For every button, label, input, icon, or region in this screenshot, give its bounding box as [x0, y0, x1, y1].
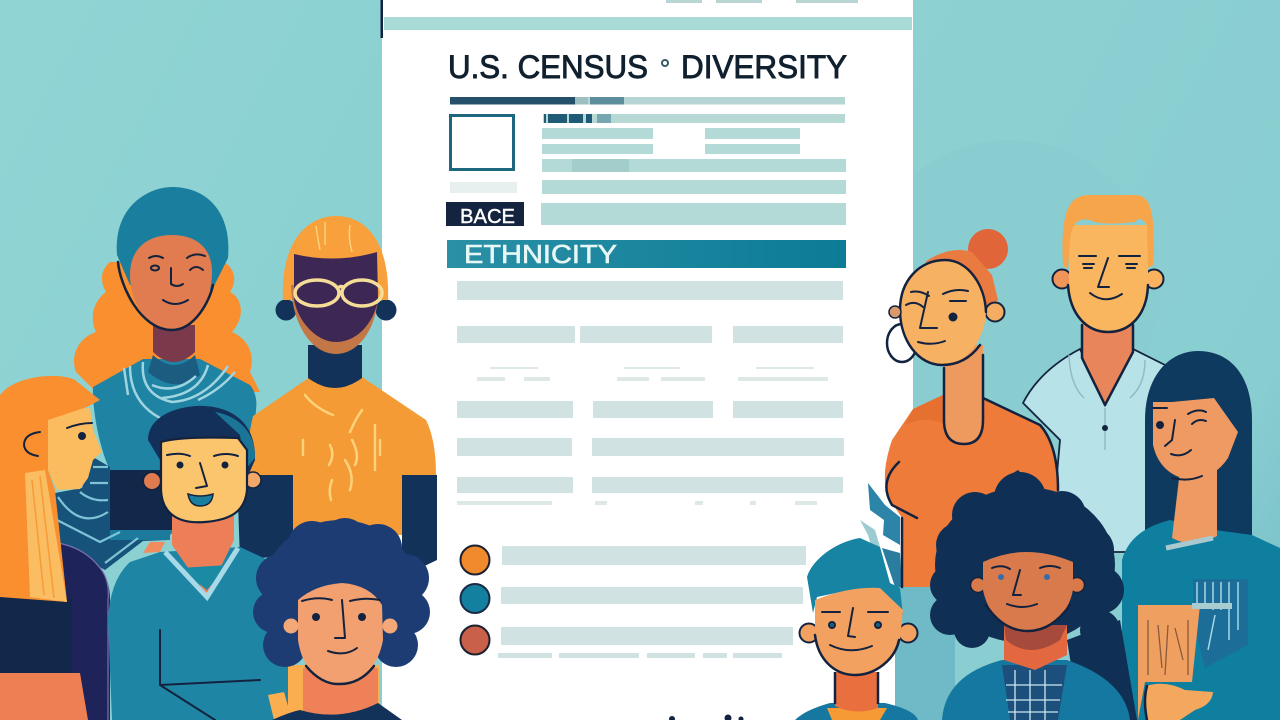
legend dot teal	[460, 584, 490, 613]
orange collar strip	[288, 665, 380, 720]
ear right	[376, 300, 396, 320]
face	[983, 552, 1073, 631]
purple body	[0, 543, 110, 720]
scarf lines	[124, 362, 235, 418]
decorative leaves	[860, 483, 902, 587]
face	[48, 408, 102, 490]
neck	[308, 345, 362, 388]
beauty mark	[948, 312, 958, 322]
title right: DIVERSITY	[681, 49, 847, 85]
v collar	[165, 548, 238, 597]
chin outline	[306, 666, 374, 684]
person: woman with long dark hair and book	[1122, 351, 1280, 720]
plaid lines	[1006, 670, 1062, 720]
navy sleeves	[237, 475, 293, 560]
ear right	[245, 472, 261, 488]
right ear	[986, 302, 1004, 322]
chin outline	[986, 605, 1070, 631]
pocket stripes	[1197, 582, 1238, 650]
legend with colored dots	[460, 546, 806, 658]
progress bar	[450, 97, 845, 104]
document left edge line	[380, 0, 383, 38]
neck	[303, 668, 378, 720]
facial features	[149, 254, 205, 304]
person: blond man in light shirt	[1023, 195, 1165, 552]
face	[900, 260, 986, 365]
hair	[1063, 195, 1154, 270]
face details	[167, 454, 238, 488]
navy shirt shoulder	[272, 703, 402, 720]
sweater	[108, 547, 290, 720]
hair	[148, 406, 255, 478]
hand	[1146, 684, 1213, 720]
ethnicity heading bar	[447, 239, 846, 269]
eyes	[998, 574, 1050, 580]
neck	[835, 672, 878, 712]
teal cuff strip	[110, 530, 170, 540]
legend dot orange	[460, 546, 490, 574]
title left: U.S. CENSUS	[448, 49, 648, 85]
form rows lower	[457, 281, 844, 505]
navy band	[0, 598, 72, 673]
race label	[446, 202, 524, 228]
legend bars	[498, 546, 806, 658]
chin line	[1172, 476, 1202, 480]
torso shade	[905, 394, 945, 425]
book	[1138, 605, 1200, 720]
hair highlight	[215, 412, 255, 470]
body line	[886, 462, 917, 587]
ear right	[382, 618, 398, 634]
title dot	[662, 60, 668, 66]
light hair strand	[25, 470, 67, 602]
person: woman with long orange hair	[0, 376, 168, 720]
neck	[172, 510, 234, 595]
striped sleeve	[55, 457, 168, 570]
jaw	[291, 285, 378, 354]
background: soft circle	[860, 140, 1160, 440]
ears	[970, 578, 986, 592]
long hair	[1145, 351, 1252, 535]
face	[130, 235, 212, 330]
navy sleeve	[110, 470, 172, 530]
face	[161, 438, 247, 522]
hand outline	[1145, 686, 1147, 720]
hair cap	[925, 250, 998, 310]
ears	[276, 300, 296, 320]
ear	[24, 432, 40, 456]
face details	[302, 598, 380, 653]
jaw outline	[118, 262, 213, 330]
neck outline	[1082, 325, 1133, 405]
background: right teal	[895, 0, 1280, 720]
background: lower teal panel	[895, 587, 955, 720]
face	[1153, 398, 1238, 480]
collar lines	[1069, 355, 1145, 450]
left earlobe	[889, 306, 901, 318]
background: left teal	[0, 0, 383, 720]
shirt	[795, 703, 918, 720]
hair	[0, 376, 100, 602]
dark face	[294, 252, 378, 342]
bottom marks	[669, 714, 744, 720]
torso	[93, 359, 256, 535]
neck	[1004, 625, 1067, 670]
inner collar	[180, 565, 228, 590]
person: boy in teal sweater	[108, 406, 290, 720]
ears	[143, 472, 161, 490]
ears	[1052, 270, 1072, 288]
coral patch behind collar	[143, 542, 165, 553]
hair	[807, 538, 903, 615]
shirt pattern	[303, 395, 380, 500]
ears	[800, 624, 818, 642]
hair strand lines	[32, 476, 54, 598]
face details	[906, 290, 968, 344]
book edge	[1192, 603, 1232, 609]
curly hair	[930, 470, 1124, 650]
hair	[283, 216, 388, 300]
form rows top	[541, 114, 846, 225]
curly hair	[253, 518, 430, 667]
neck	[1082, 322, 1133, 405]
torso	[885, 394, 1058, 587]
person: man with glasses and orange shirt	[237, 216, 437, 573]
ears	[284, 618, 298, 634]
neck	[944, 345, 983, 444]
eye	[67, 423, 92, 439]
ethnicity heading bar: ETHNICITY	[464, 239, 617, 269]
collar dark	[148, 355, 200, 384]
face details	[992, 566, 1060, 607]
button	[1102, 425, 1108, 431]
legend dot red	[460, 626, 490, 654]
faint header text strip	[666, 0, 858, 3]
chin outline	[1068, 285, 1148, 332]
right sleeve	[402, 475, 437, 573]
bun	[968, 229, 1008, 269]
sleeve stripes	[57, 467, 138, 563]
plaid shirt	[1002, 665, 1067, 720]
photo box	[450, 116, 514, 170]
neck shadow	[1004, 625, 1067, 650]
glasses	[295, 280, 382, 306]
chin outline	[815, 635, 899, 675]
body edge	[58, 543, 108, 720]
cap	[117, 187, 228, 290]
person: woman with hair bun in orange top	[885, 229, 1058, 587]
neck outline	[835, 672, 878, 704]
orange curly hair	[74, 262, 260, 392]
neck	[153, 325, 195, 362]
ear right	[1144, 270, 1164, 288]
book strokes	[1148, 620, 1188, 675]
neck	[1172, 470, 1217, 544]
hair streaks	[316, 222, 352, 252]
face	[815, 588, 903, 675]
striped pocket	[1193, 579, 1248, 668]
face details	[1079, 256, 1140, 299]
hair behind shoulder	[1067, 620, 1137, 720]
person: curly haired woman	[930, 470, 1137, 720]
sweater	[1122, 520, 1280, 720]
face details	[1153, 408, 1206, 455]
shirt	[247, 377, 436, 535]
top header band	[384, 17, 912, 30]
mouth	[188, 494, 213, 506]
ear right	[1070, 578, 1084, 592]
shoulder line	[983, 398, 1058, 490]
orange undershirt	[827, 708, 887, 720]
face	[298, 583, 383, 684]
face details	[822, 608, 888, 650]
earring	[887, 324, 917, 362]
face	[1069, 225, 1148, 332]
person: boy with teal hair	[795, 538, 918, 720]
shirt	[1023, 349, 1165, 552]
ear right	[898, 624, 918, 642]
person: curly haired boy	[253, 518, 430, 720]
neck outline	[944, 355, 983, 444]
coral lower	[0, 673, 88, 720]
person: woman with teal cap and orange hair	[74, 187, 260, 540]
jacket	[942, 660, 1130, 720]
sweater fold lines	[160, 630, 260, 720]
race label: BACE	[460, 206, 515, 228]
document sheet	[382, 0, 913, 720]
title	[448, 49, 847, 85]
neckline	[1166, 538, 1213, 548]
caption under photo box	[450, 182, 517, 193]
orange book edge	[268, 692, 292, 720]
face outline	[900, 260, 986, 365]
